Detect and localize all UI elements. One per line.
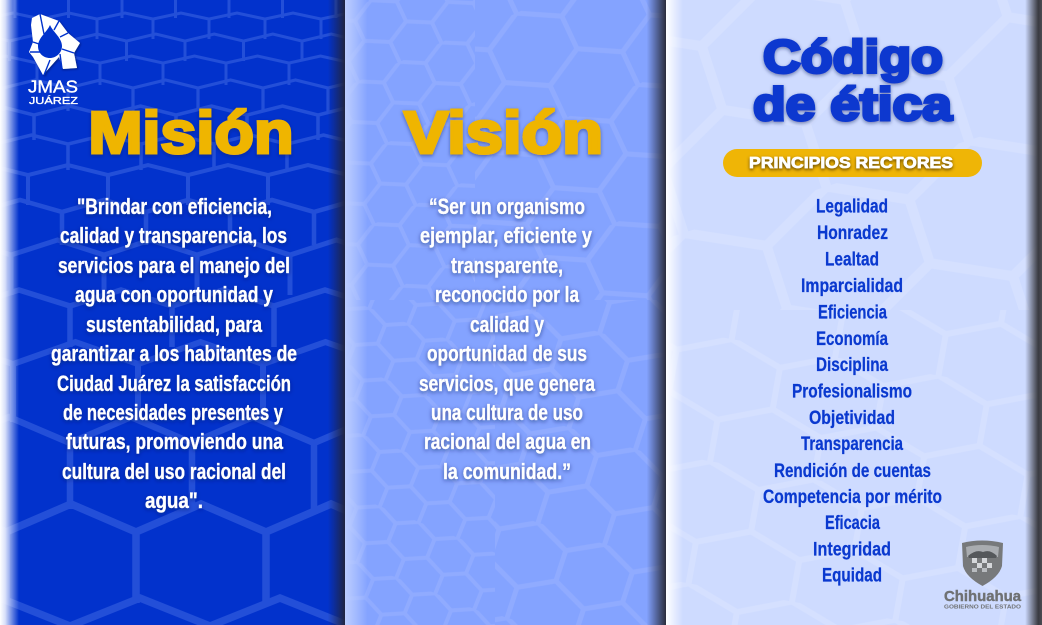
list: principios: Equidad — [822, 564, 882, 586]
list: principios — [763, 196, 942, 586]
title: Visión: Visión — [404, 100, 603, 166]
logo: Gobierno de Chihuahua: GOBIERNO DEL ESTADO — [944, 604, 1022, 610]
list: principios: Legalidad — [816, 196, 888, 218]
text: misión statement: calidad y transparencia, los — [60, 223, 287, 248]
panel: código de ética — [666, 0, 1042, 625]
text: visión statement: ejemplar, eficiente y — [420, 223, 593, 248]
title: Código de ética: de ética — [753, 78, 952, 130]
text: visión statement: calidad y — [470, 312, 545, 337]
list: principios: Integridad — [813, 538, 891, 560]
text: visión statement: reconocido por la — [435, 282, 580, 307]
text: visión statement: oportunidad de sus — [427, 341, 587, 366]
text: visión statement — [419, 194, 596, 484]
list: principios: Profesionalismo — [792, 380, 912, 402]
text: misión statement: Ciudad Juárez la satisfacción — [57, 371, 291, 396]
text: misión statement: cultura del uso racional del — [62, 459, 286, 484]
list: principios: Disciplina — [816, 354, 889, 376]
text: misión statement: servicios para el manejo del — [58, 253, 290, 278]
pill: principios rectores: PRINCIPIOS RECTORES — [749, 155, 953, 172]
list: principios: Competencia por mérito — [763, 486, 942, 508]
logo: JMAS Juárez: JUÁREZ — [29, 94, 78, 107]
logo: Gobierno de Chihuahua — [944, 540, 1022, 610]
text: visión statement: servicios, que genera — [419, 371, 596, 396]
text: visión statement: la comunidad.” — [443, 459, 571, 484]
title: Código de ética — [753, 30, 952, 130]
text: misión statement — [51, 194, 297, 513]
title: Misión: Misión — [88, 100, 294, 166]
logo: JMAS Juárez — [28, 14, 80, 107]
logo: JMAS Juárez: JMAS — [28, 77, 78, 97]
list: principios: Objetividad — [809, 407, 895, 429]
text: misión statement: agua con oportunidad y — [75, 282, 274, 307]
list: principios: Imparcialidad — [801, 275, 903, 297]
text: visión statement: transparente, — [451, 253, 563, 278]
text: misión statement: futuras, promoviendo una — [66, 429, 284, 454]
text: misión statement: de necesidades presentes y — [63, 400, 284, 425]
list: principios: Lealtad — [825, 248, 879, 270]
text: misión statement: sustentabilidad, para — [86, 312, 263, 337]
text: visión statement: racional del agua en — [424, 429, 591, 454]
text: misión statement: garantizar a los habitantes de — [51, 341, 297, 366]
title: Código de ética: Código — [763, 30, 943, 82]
text: misión statement: agua". — [145, 488, 203, 513]
list: principios: Rendición de cuentas — [774, 460, 931, 482]
logo: Gobierno de Chihuahua: Chihuahua — [944, 588, 1022, 605]
list: principios: Economía — [816, 328, 889, 350]
list: principios: Eficacia — [825, 512, 881, 534]
text: visión statement: “Ser un organismo — [429, 194, 585, 219]
text: visión statement: una cultura de uso — [431, 400, 583, 425]
list: principios: Transparencia — [801, 433, 904, 455]
panel: visión — [345, 0, 666, 625]
list: principios: Honradez — [817, 222, 888, 244]
pill: principios rectores — [723, 149, 982, 177]
panel: misión — [0, 0, 345, 625]
text: misión statement: "Brindar con eficiencia, — [77, 194, 272, 219]
list: principios: Eficiencia — [818, 302, 888, 324]
